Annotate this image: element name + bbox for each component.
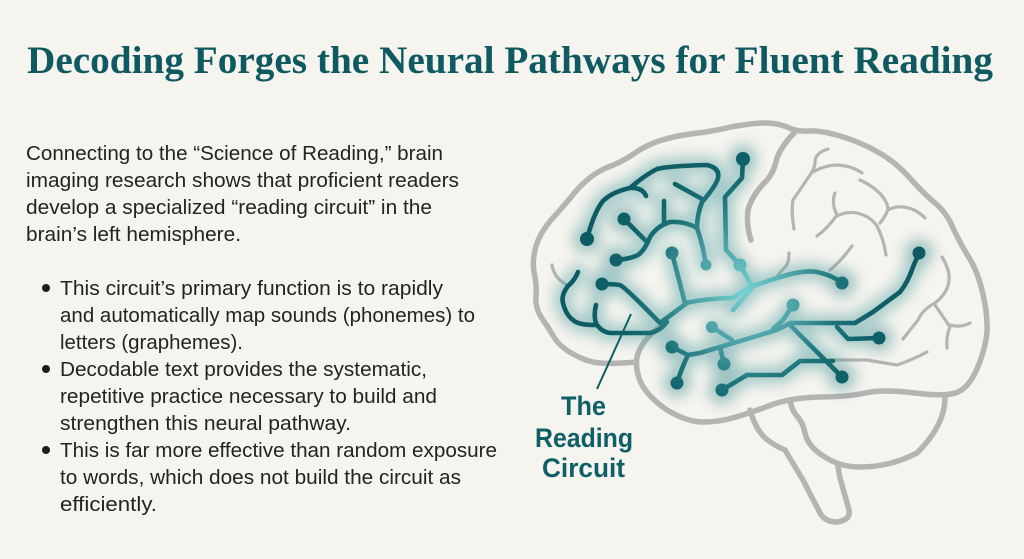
circuit nodes: [580, 152, 926, 396]
label: The Reading Circuit: [535, 391, 633, 483]
glow behind reading circuit: [563, 145, 933, 404]
pointer line to circuit: [597, 314, 631, 389]
title: Decoding Forges the Neural Pathways for Fluent Reading: [27, 39, 993, 82]
reading circuit pathways: [563, 152, 926, 396]
bullet: primary function: This circuit’s primary function is to rapidly: [60, 277, 444, 300]
bullet: random exposure: efficiently.: [60, 493, 157, 516]
brain outline: [533, 123, 987, 522]
bullet: primary function: [42, 277, 475, 354]
brain folds: [552, 149, 970, 365]
intro paragraph: Connecting to the “Science of Reading,” brain: [26, 142, 443, 165]
bullet: decodable text: Decodable text provides the systematic,: [60, 358, 427, 381]
intro paragraph: develop a specialized “reading circuit” in the: [26, 196, 432, 219]
bullet: decodable text: repetitive practice necessary to build and: [60, 385, 437, 408]
bullet: decodable text: strengthen this neural pathway.: [60, 412, 351, 435]
bullet: random exposure: [42, 439, 497, 516]
brain illustration: [533, 123, 987, 522]
label: The Reading Circuit: The: [561, 391, 606, 421]
intro paragraph: brain’s left hemisphere.: [26, 223, 241, 246]
bullet: random exposure: This is far more effective than random exposure: [60, 439, 497, 462]
bullet: primary function: and automatically map sounds (phonemes) to: [60, 304, 475, 327]
bullet: decodable text: [42, 358, 437, 435]
label: The Reading Circuit: Reading: [535, 423, 633, 453]
label: The Reading Circuit: Circuit: [542, 453, 625, 483]
intro paragraph: [26, 142, 459, 246]
bullet: primary function: letters (graphemes).: [60, 331, 243, 354]
intro paragraph: imaging research shows that proficient readers: [26, 169, 459, 192]
bullet: random exposure: to words, which does not build the circuit as: [60, 466, 461, 489]
